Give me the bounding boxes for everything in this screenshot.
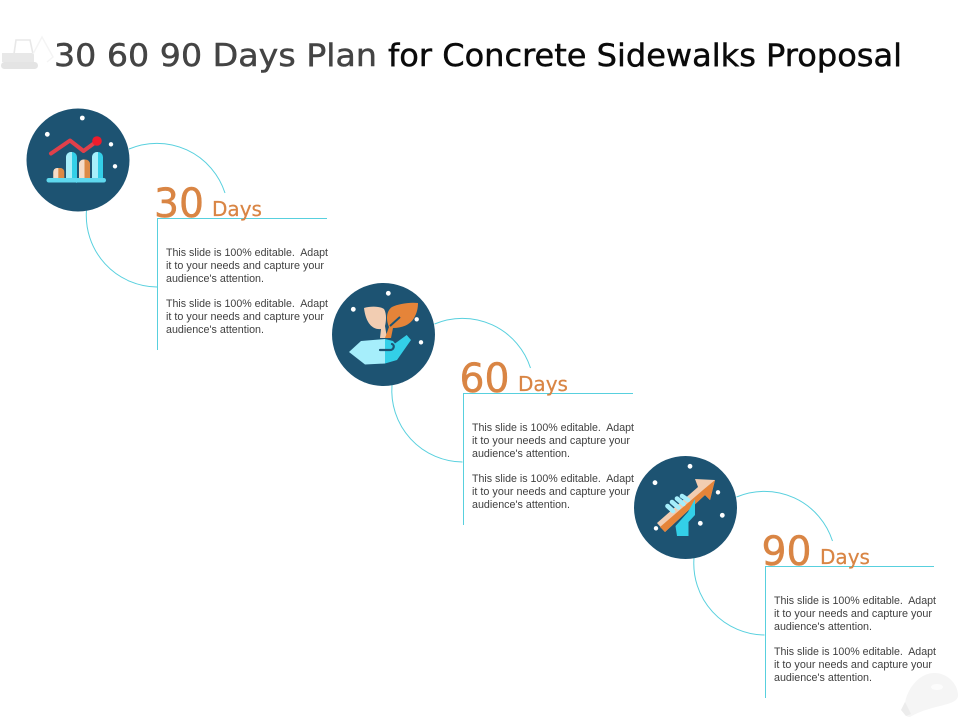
heading: 90 Days: 90	[762, 529, 812, 575]
panel: 60 days	[332, 283, 634, 525]
heading: 30 Days: Days	[212, 197, 262, 221]
text block 60 days: This slide is 100% editable. Adapt	[472, 473, 634, 485]
heading: 30 Days	[154, 181, 262, 227]
text block 30 days: audience's attention.	[166, 324, 264, 336]
text frame 60 days	[464, 394, 633, 525]
text block 60 days: This slide is 100% editable. Adapt	[472, 422, 634, 434]
text block 30 days: it to your needs and capture your	[166, 260, 324, 272]
text frame 90 days	[766, 566, 934, 698]
icon: helmet watermark	[901, 673, 958, 717]
text block 60 days: it to your needs and capture your	[472, 435, 630, 447]
icon: bulldozer watermark	[1, 37, 53, 69]
connector arcs 90 days	[694, 491, 832, 635]
text block 30 days	[166, 247, 328, 336]
text block 60 days: audience's attention.	[472, 448, 570, 460]
text block 30 days: This slide is 100% editable. Adapt	[166, 247, 328, 259]
text block 60 days	[472, 422, 634, 511]
text block 90 days: audience's attention.	[774, 672, 872, 684]
heading: 60 Days	[460, 356, 568, 402]
text block 30 days: This slide is 100% editable. Adapt	[166, 298, 328, 310]
text block 30 days: it to your needs and capture your	[166, 311, 324, 323]
connector arcs 60 days	[392, 318, 530, 462]
icon: bar chart disc	[26, 108, 130, 212]
text block 60 days: audience's attention.	[472, 499, 570, 511]
panel: 30 days	[26, 108, 328, 350]
icon: plant in hand disc	[332, 283, 435, 386]
text block 90 days: it to your needs and capture your	[774, 659, 932, 671]
icon: hand holding arrow disc	[634, 456, 737, 559]
text block 30 days: audience's attention.	[166, 273, 264, 285]
panel: 90 days	[634, 456, 936, 698]
title	[54, 38, 902, 74]
title: 30 60 90 Days Plan	[54, 38, 377, 74]
heading: 60 Days: 60	[460, 356, 510, 402]
text frame 30 days	[158, 218, 327, 350]
connector arcs 30 days	[86, 143, 225, 287]
heading: 90 Days: Days	[820, 545, 870, 569]
text block 90 days: it to your needs and capture your	[774, 608, 932, 620]
heading: 60 Days: Days	[518, 372, 568, 396]
text block 60 days: it to your needs and capture your	[472, 486, 630, 498]
text block 90 days: This slide is 100% editable. Adapt	[774, 595, 936, 607]
heading: 30 Days: 30	[154, 181, 204, 227]
text block 90 days: This slide is 100% editable. Adapt	[774, 646, 936, 658]
title: for Concrete Sidewalks Proposal	[388, 38, 902, 74]
text block 90 days: audience's attention.	[774, 621, 872, 633]
heading: 90 Days	[762, 529, 870, 575]
text block 90 days	[774, 595, 936, 684]
